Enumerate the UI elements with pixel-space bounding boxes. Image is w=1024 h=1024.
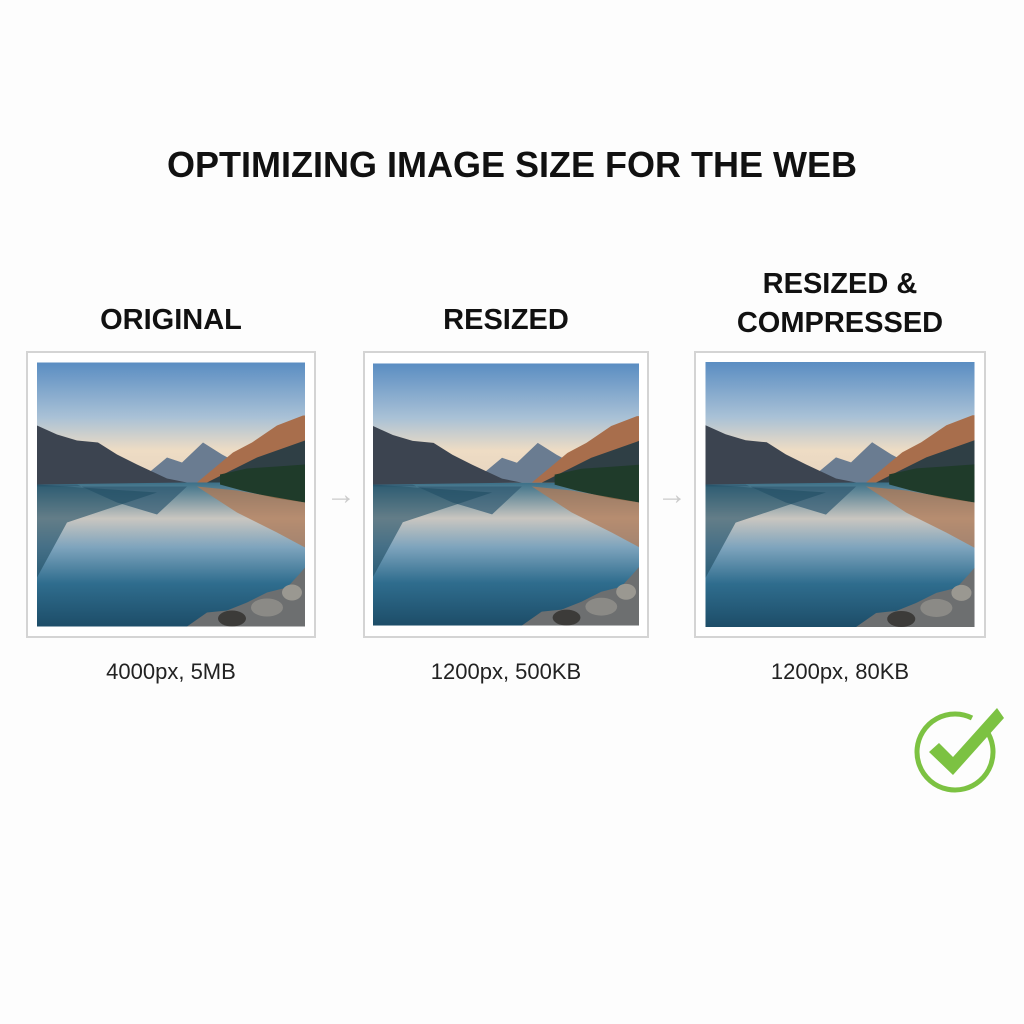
title: OPTIMIZING IMAGE SIZE FOR THE WEB — [167, 144, 857, 185]
heading: resized & compressed — [737, 268, 943, 339]
caption 1: 4000px, 5MB — [106, 659, 236, 684]
caption 3: 1200px, 80KB — [771, 659, 909, 684]
heading: original: ORIGINAL — [100, 304, 242, 336]
caption 2: 1200px, 500KB — [431, 659, 581, 684]
panel: original image — [26, 351, 316, 638]
arrow 1: → — [326, 478, 356, 511]
icon: check — [914, 708, 1004, 792]
panel: compressed image — [694, 351, 986, 638]
heading: resized: RESIZED — [443, 304, 569, 336]
panel: resized image — [363, 351, 649, 638]
heading: resized & compressed: RESIZED & — [763, 268, 917, 300]
heading: resized & compressed: COMPRESSED — [737, 307, 943, 339]
arrow 2: → — [657, 478, 687, 511]
